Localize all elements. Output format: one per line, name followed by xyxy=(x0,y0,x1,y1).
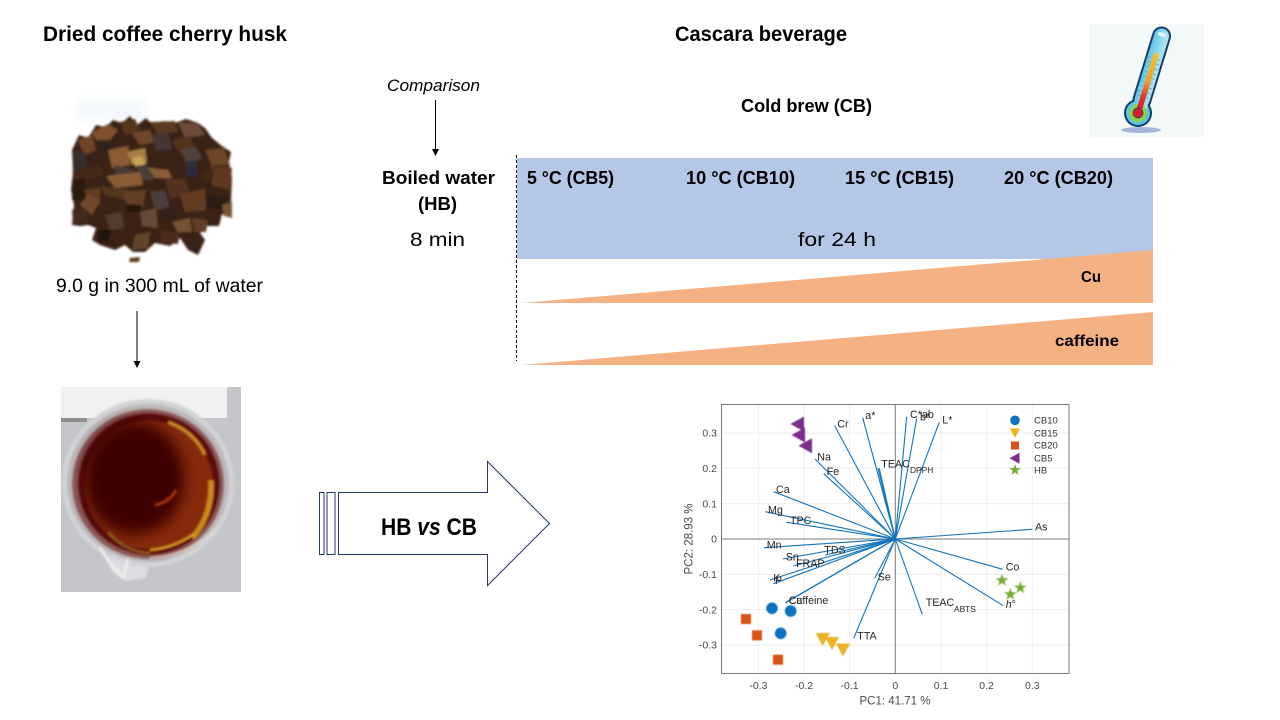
label: 15 °C: 15 °C (CB15) xyxy=(845,168,954,188)
heading: cascara beverage: Cascara beverage xyxy=(675,22,847,46)
loading labels: TEAC xyxy=(926,597,954,609)
wedge: Cu increases with temperature: Cu xyxy=(1081,269,1101,286)
y axis tick labels: 0.1 xyxy=(702,498,717,510)
loading labels: FRAP xyxy=(796,558,825,570)
loading labels: P xyxy=(775,575,782,587)
loading labels: C*ab xyxy=(910,409,934,421)
points: CB10 xyxy=(766,602,796,639)
loading labels: Mn xyxy=(767,540,782,552)
arrow: HB vs CB block arrow xyxy=(320,462,550,586)
loading labels: TTA xyxy=(857,631,878,643)
panel: cold brew temperatures xyxy=(517,158,1153,259)
y axis tick labels: 0 xyxy=(711,534,717,546)
label: boiled water condition xyxy=(382,168,495,251)
x axis tick labels: 0.1 xyxy=(934,680,948,692)
wedge: caffeine increases with temperature xyxy=(522,312,1153,365)
wedge: caffeine increases with temperature: caffeine xyxy=(1055,333,1119,350)
legend: CB15 xyxy=(1034,428,1058,440)
y axis tick labels: -0.2 xyxy=(699,604,717,616)
loading labels: h° xyxy=(1006,599,1016,611)
label: boiled water condition: (HB) xyxy=(418,194,457,214)
x axis tick labels: 0 xyxy=(892,680,898,692)
arrow: comparison to boiled water xyxy=(432,100,439,156)
loading labels: Se xyxy=(878,571,891,583)
y axis tick labels: 0.3 xyxy=(702,428,717,440)
loading labels: Ca xyxy=(776,484,790,496)
loading labels: L* xyxy=(942,414,952,426)
y axis tick labels: -0.1 xyxy=(699,569,717,581)
icon: thermometer xyxy=(1089,24,1204,137)
loading labels: ABTS xyxy=(954,604,976,614)
x axis tick labels xyxy=(749,680,1040,692)
label: 10 °C: 10 °C (CB10) xyxy=(686,168,795,188)
y axis tick labels xyxy=(699,428,717,652)
photo: dried coffee husk pile xyxy=(71,96,232,264)
label: comparison: Comparison xyxy=(387,76,480,95)
label: boiled water condition: 8 min xyxy=(410,229,465,251)
x axis tick labels: 0.3 xyxy=(1025,680,1040,692)
loading labels: Sn xyxy=(786,552,799,564)
label: 5 °C: 5 °C (CB5) xyxy=(527,168,614,188)
loading labels: a* xyxy=(865,410,875,422)
loading labels: Fe xyxy=(827,466,839,478)
points: CB15 xyxy=(816,633,850,656)
label: 20 °C: 20 °C (CB20) xyxy=(1004,168,1113,188)
x axis tick labels: -0.1 xyxy=(841,680,859,692)
loading labels: Na xyxy=(817,451,831,463)
x axis tick labels: -0.3 xyxy=(749,680,768,692)
y axis tick labels: 0.2 xyxy=(702,463,717,475)
points: CB20 xyxy=(741,614,783,665)
loading labels: TEAC xyxy=(881,459,910,471)
label: HB vs CB: HB vs CB xyxy=(381,514,477,541)
loading labels: Cr xyxy=(837,418,849,430)
label: cold brew: Cold brew (CB) xyxy=(741,96,872,116)
loading labels: K xyxy=(773,572,781,584)
loading labels: b* xyxy=(920,412,930,424)
loading labels: As xyxy=(1035,522,1047,534)
x axis tick labels: 0.2 xyxy=(979,680,994,692)
x axis tick labels: -0.2 xyxy=(795,680,813,692)
heading: dried coffee cherry husk: Dried coffee cherry husk xyxy=(43,22,287,46)
loading labels: Caffeine xyxy=(789,595,828,607)
loading labels: TPC xyxy=(790,515,812,527)
wedge: Cu increases with temperature xyxy=(522,250,1153,303)
photo: beaker of brewed cascara xyxy=(61,387,241,592)
label: boiled water condition: Boiled water xyxy=(382,168,495,188)
loading labels: TDS xyxy=(824,545,846,557)
label: duration: for 24 h xyxy=(798,229,876,251)
y axis tick labels: -0.3 xyxy=(699,640,717,652)
loading labels: Mg xyxy=(768,505,783,517)
legend: CB5 xyxy=(1034,454,1052,464)
loading labels: DPPH xyxy=(910,465,933,475)
legend: CB20 xyxy=(1034,440,1058,452)
legend: CB10 xyxy=(1034,416,1058,426)
x axis title: PC1: 41.71 % xyxy=(860,696,930,708)
y axis title: PC2: 28.93 % xyxy=(684,504,696,574)
caption: husk amount: 9.0 g in 300 mL of water xyxy=(56,275,264,297)
loading labels: Cu xyxy=(789,595,802,607)
legend xyxy=(1009,416,1058,476)
arrow: husk to beverage xyxy=(134,311,140,368)
points: HB xyxy=(996,574,1027,600)
loading labels xyxy=(767,409,1047,643)
points: CB5 xyxy=(790,416,812,453)
legend: HB xyxy=(1034,466,1047,476)
chart: PCA biplot xyxy=(684,404,1069,708)
loading labels: Co xyxy=(1006,561,1019,573)
loading vectors xyxy=(764,417,1032,638)
